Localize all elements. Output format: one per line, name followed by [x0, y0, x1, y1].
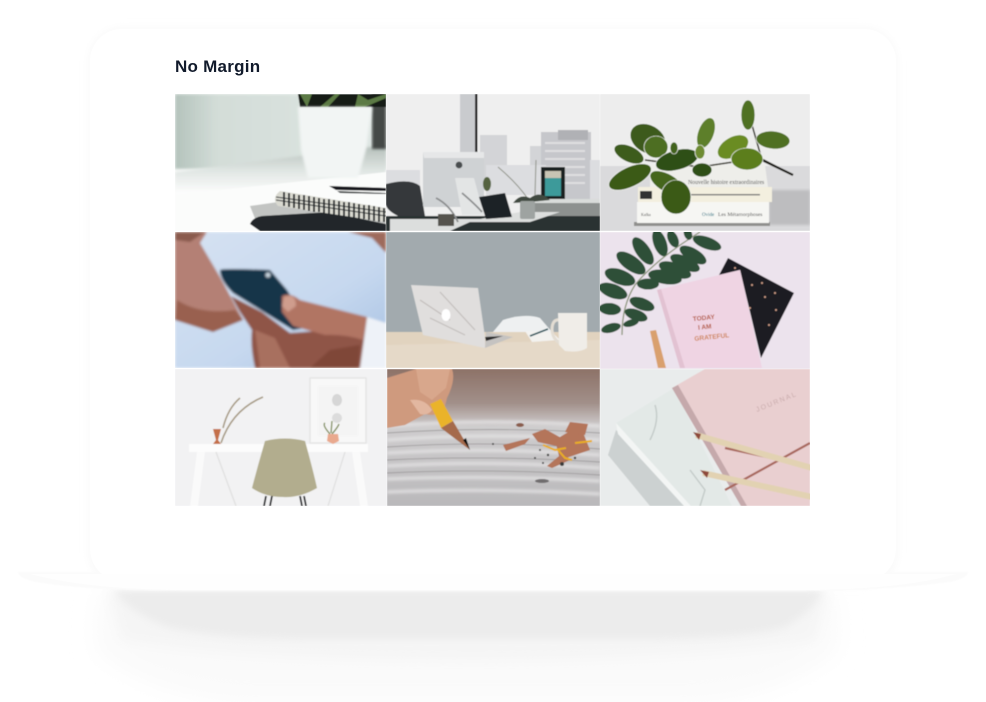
- book cover lettering: [693, 314, 730, 343]
- photo: notebook and white plant pot: [175, 94, 386, 231]
- photo: pink gratitude book and fern: [597, 227, 810, 369]
- book spine titles: Ovide: [702, 213, 715, 218]
- photo: hands holding a smartphone: [175, 232, 386, 368]
- book cover lettering: TODAY: [693, 314, 716, 323]
- photo: pencil and shavings: [387, 369, 600, 506]
- book cover lettering: I AM: [698, 323, 712, 332]
- image grid: [175, 94, 812, 506]
- photo: marble notebook and pink journal with pencils: [600, 369, 812, 506]
- photo: books and green leaves: [600, 94, 810, 231]
- book spine titles: [641, 180, 765, 218]
- photo: marble laptop on wooden table: [386, 232, 600, 368]
- book spine titles: Nouvelle histoire extraordinaires: [688, 180, 765, 186]
- photo: office desk with computer: [386, 94, 600, 231]
- book cover lettering: GRATEFUL: [694, 332, 730, 343]
- photo: white desk with beige chair: [175, 369, 387, 506]
- book spine titles: Les Métamorphoses: [718, 212, 762, 218]
- journal cover lettering: JOURNAL: [755, 391, 798, 414]
- book spine titles: Kafka: [641, 212, 651, 217]
- heading: No Margin: [175, 57, 260, 76]
